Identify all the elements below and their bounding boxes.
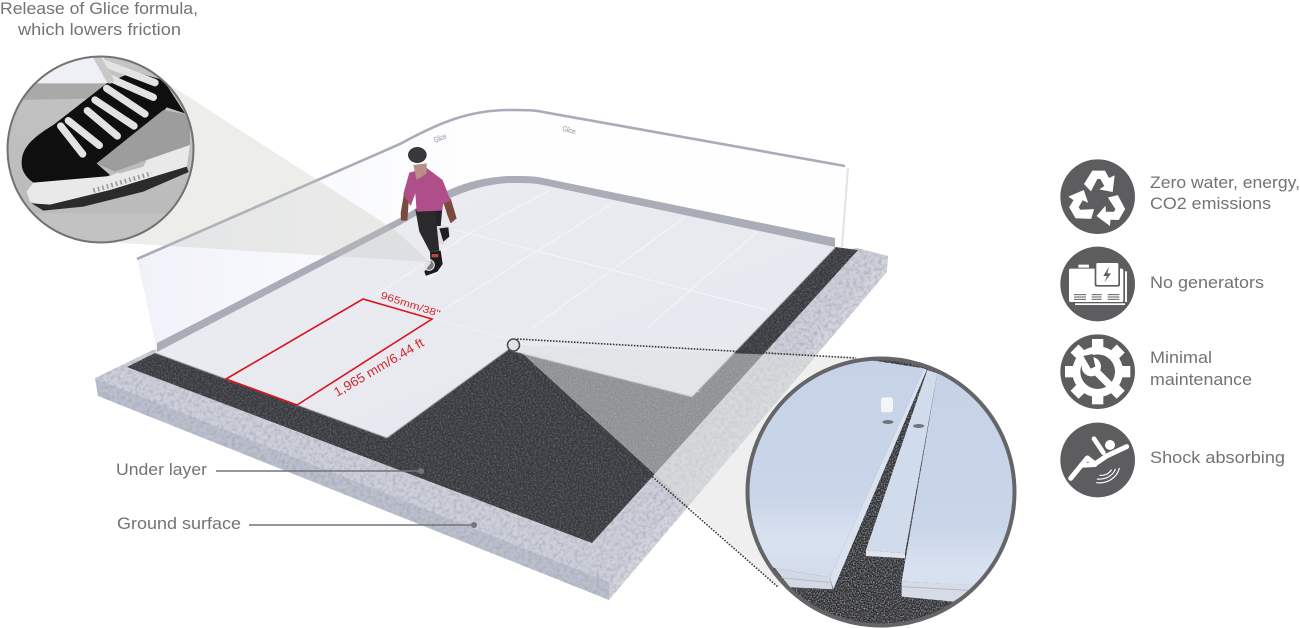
benefit: shock absorbing: Shock absorbing bbox=[1150, 448, 1285, 467]
skate callout cone bbox=[120, 85, 430, 262]
icon: gear and wrench bbox=[1060, 334, 1135, 409]
laces bbox=[61, 57, 155, 154]
panel dimension outline bbox=[226, 290, 442, 405]
icon: recycle bbox=[1060, 159, 1135, 234]
magnifier: panel joint bbox=[746, 356, 1016, 628]
ground surface slab bbox=[95, 248, 888, 600]
under layer label: Under layer bbox=[116, 460, 207, 479]
benefit: minimal maintenance bbox=[1060, 334, 1252, 409]
back and left rink walls bbox=[137, 110, 848, 352]
blade holder bbox=[27, 145, 190, 207]
skater bbox=[401, 147, 457, 280]
floor panel seams bbox=[373, 190, 767, 392]
right panel bbox=[902, 374, 1012, 585]
skate caption bbox=[0, 0, 198, 39]
length dimension: 1,965 mm/6.44 ft bbox=[331, 335, 427, 400]
ice floor bbox=[155, 176, 835, 438]
wall logos: Glice bbox=[432, 131, 448, 145]
benefit: zero emissions: Zero water, energy, bbox=[1150, 173, 1300, 192]
ground surface label: Ground surface bbox=[117, 514, 241, 533]
icon: falling skater bbox=[1060, 423, 1135, 497]
under layer bbox=[127, 247, 858, 543]
background floor tones bbox=[36, 58, 108, 84]
ground surface label bbox=[117, 514, 477, 533]
runner bbox=[32, 167, 189, 211]
width dimension: 965mm/38" bbox=[379, 290, 442, 320]
benefit: no generators bbox=[1060, 247, 1264, 321]
joint callout cone bbox=[508, 339, 1000, 587]
icon: generator bbox=[1060, 247, 1135, 321]
wall logos bbox=[432, 124, 578, 145]
skate caption: which lowers friction bbox=[17, 20, 181, 39]
benefit: shock absorbing bbox=[1060, 423, 1285, 497]
magnifier: skate blade bbox=[0, 53, 200, 247]
peg and holes bbox=[881, 397, 893, 412]
boot bbox=[22, 72, 185, 184]
left panel bbox=[750, 360, 924, 578]
benefit: minimal maintenance: Minimal bbox=[1150, 348, 1212, 367]
holder holes bbox=[93, 173, 152, 191]
boot side panel bbox=[97, 110, 190, 172]
under layer label bbox=[116, 460, 424, 479]
inner right panel bbox=[866, 370, 937, 553]
benefit: zero emissions: CO2 emissions bbox=[1150, 194, 1271, 213]
wall logos: Glice. bbox=[562, 124, 578, 137]
wall top edge bbox=[137, 110, 845, 259]
wall right end bbox=[842, 168, 848, 247]
dark under layer bbox=[773, 360, 971, 624]
benefit: minimal maintenance: maintenance bbox=[1150, 370, 1252, 389]
benefit: zero emissions bbox=[1060, 159, 1300, 234]
benefit: no generators: No generators bbox=[1150, 273, 1264, 292]
wall base strip bbox=[157, 176, 835, 352]
